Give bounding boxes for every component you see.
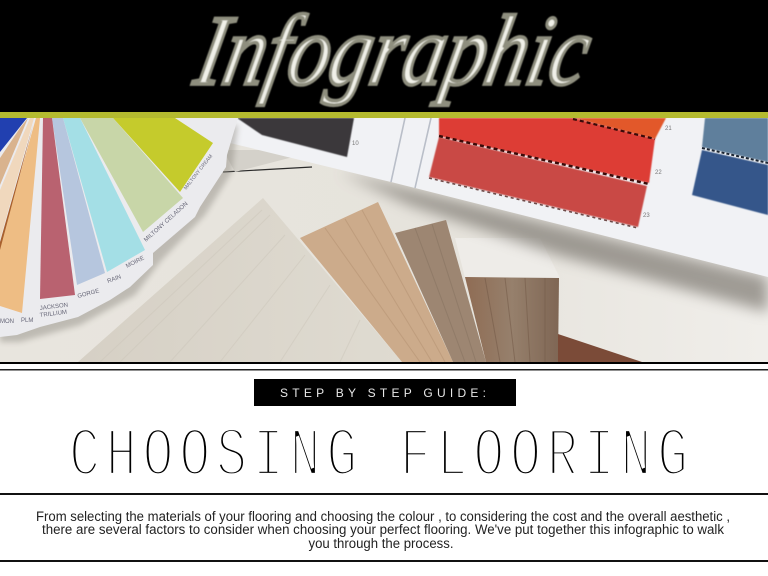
fan colour labels: TRILLIUM [40,310,67,319]
plank: pale ash [78,198,402,362]
navy fabric swatch [692,150,768,215]
rose swatch [40,118,75,299]
divider above intro [0,493,768,495]
fabric sample booklet [230,118,768,277]
intro paragraph: you through the process. [308,536,454,551]
peach swatch [0,118,40,313]
fan colour labels: JACKSON [40,303,68,312]
swatch numbers: 22 [655,170,662,176]
sage swatch [80,118,183,232]
plank: walnut [465,277,559,362]
fan colour labels: MALTONY CREAM [183,154,214,191]
steel blue fabric swatch [702,118,768,162]
fan colour labels: MON [0,319,14,325]
colour swatch fan [0,118,238,337]
wood sample planks [78,198,642,362]
red fabric swatch [439,118,655,183]
periwinkle swatch [52,118,105,285]
cyan swatch [63,118,145,272]
step by step badge: STEP BY STEP GUIDE: [280,386,486,400]
intro paragraph: From selecting the materials of your flooring and choosing the colour , to considering the cost and the overall aesthetic , [36,509,730,524]
fan colour labels: MILTONY CELADON [143,201,189,243]
fan colour labels: MOIRE [125,256,145,270]
pale reflection behind planks [455,238,548,278]
wooden floor background [0,143,768,362]
plank: dark mahogany [558,334,642,362]
plank: light oak [300,202,453,362]
orange fabric swatch [573,118,666,139]
dark fabric swatch [237,118,354,157]
fan colour labels [0,154,214,325]
cream swatches [0,118,34,240]
divider lines under photo [0,362,768,370]
swatch numbers [352,126,672,219]
plank: taupe [395,220,486,362]
blue swatch [0,118,27,152]
step by step badge [254,379,516,406]
booklet shadow [340,172,768,312]
swatch numbers: 10 [352,141,359,147]
fan colour labels: PLM [21,318,33,324]
fan colour labels: RAIN [107,274,122,285]
coral fabric swatch [429,137,647,227]
colour fan shadow [0,125,238,342]
header banner [0,0,768,112]
fan colour labels: GORGE [77,288,100,300]
swatch numbers: 23 [643,213,650,219]
intro paragraph: there are several factors to consider when choosing your perfect flooring. We've put together this infographic to walk [42,522,724,537]
swatch numbers: 21 [665,126,672,132]
main heading: Choosing Flooring: CHOOSING FLOORING [69,418,688,497]
fan card base [0,118,238,337]
yellow swatch [113,118,213,192]
hero photo: flooring samples [0,118,768,362]
intro paragraph [36,509,730,551]
olive divider band [0,112,768,118]
divider below intro [0,560,768,562]
